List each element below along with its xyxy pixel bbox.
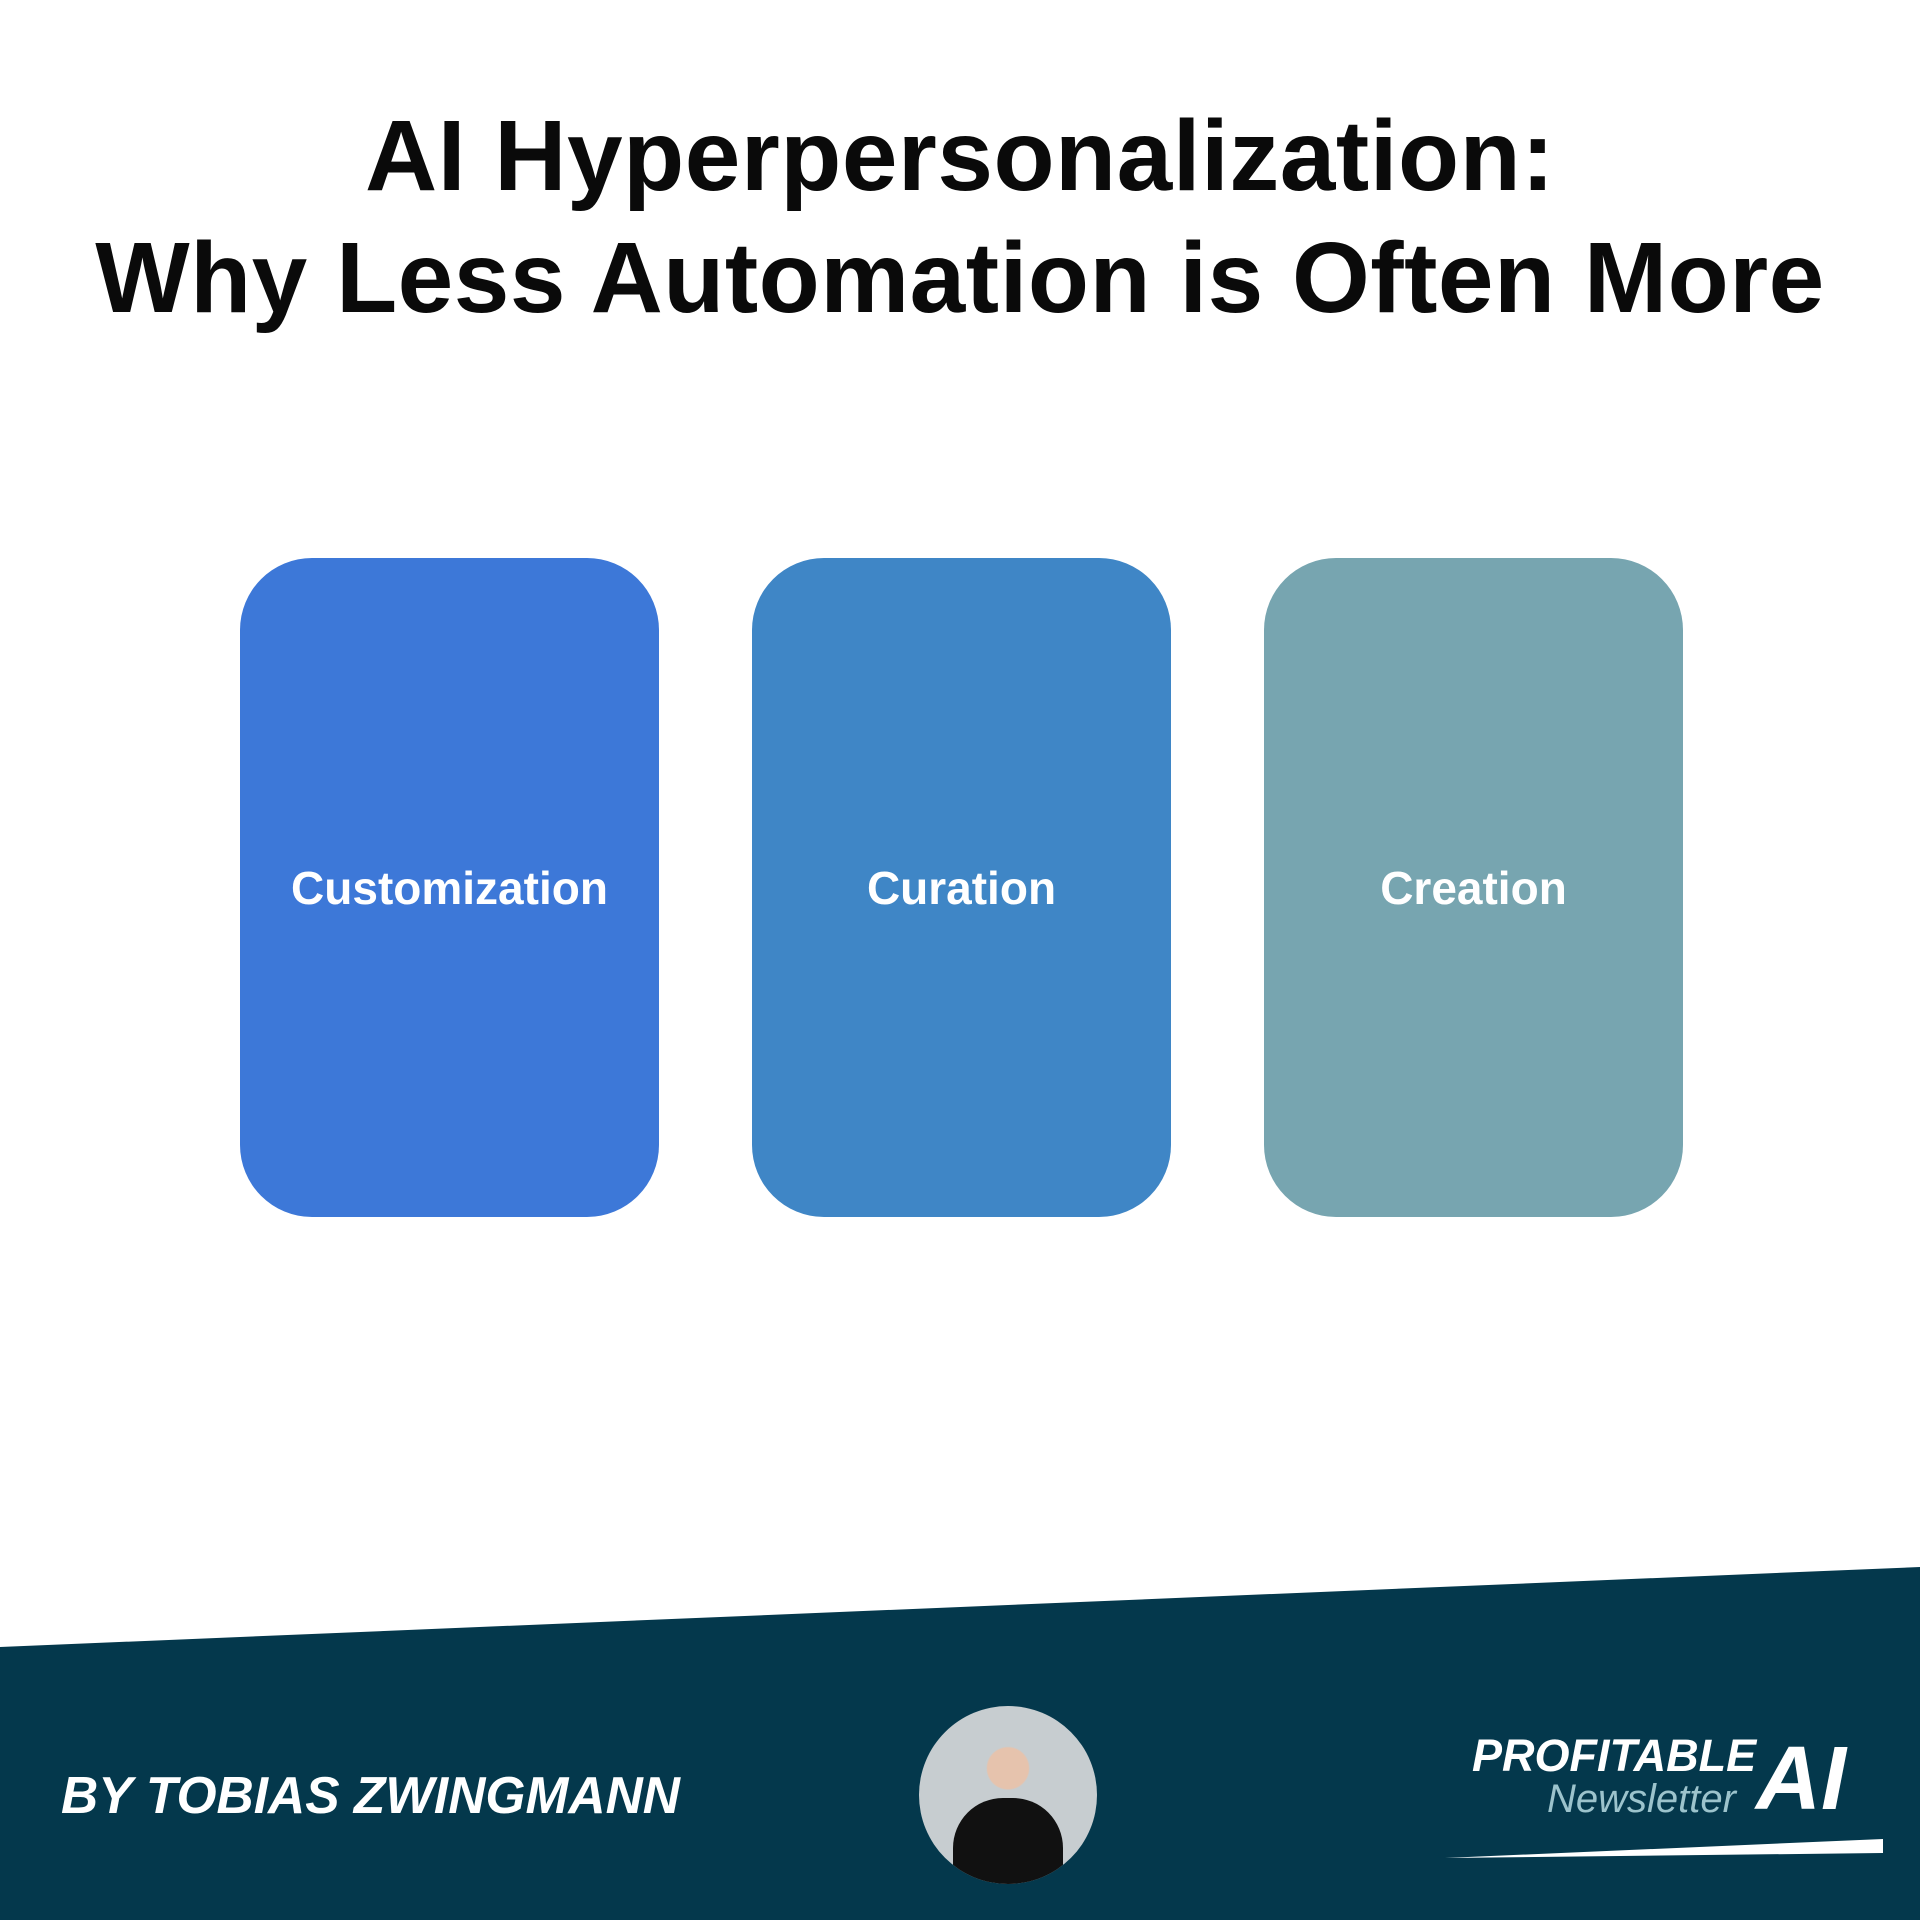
avatar <box>919 1706 1097 1884</box>
card: curation <box>752 558 1171 1217</box>
card: creation <box>1264 558 1683 1217</box>
title: Why Less Automation is Often More <box>95 222 1825 334</box>
card: creation: Creation <box>1380 862 1567 914</box>
card: customization: Customization <box>291 862 608 914</box>
card: customization <box>240 558 659 1217</box>
logo: AI <box>1756 1729 1846 1829</box>
author byline: BY TOBIAS ZWINGMANN <box>61 1766 680 1824</box>
logo <box>1446 1729 1883 1858</box>
card: curation: Curation <box>867 862 1056 914</box>
logo: PROFITABLE <box>1472 1730 1756 1781</box>
logo: Newsletter <box>1547 1777 1736 1821</box>
title: AI Hyperpersonalization: <box>365 100 1555 212</box>
title <box>95 100 1825 334</box>
